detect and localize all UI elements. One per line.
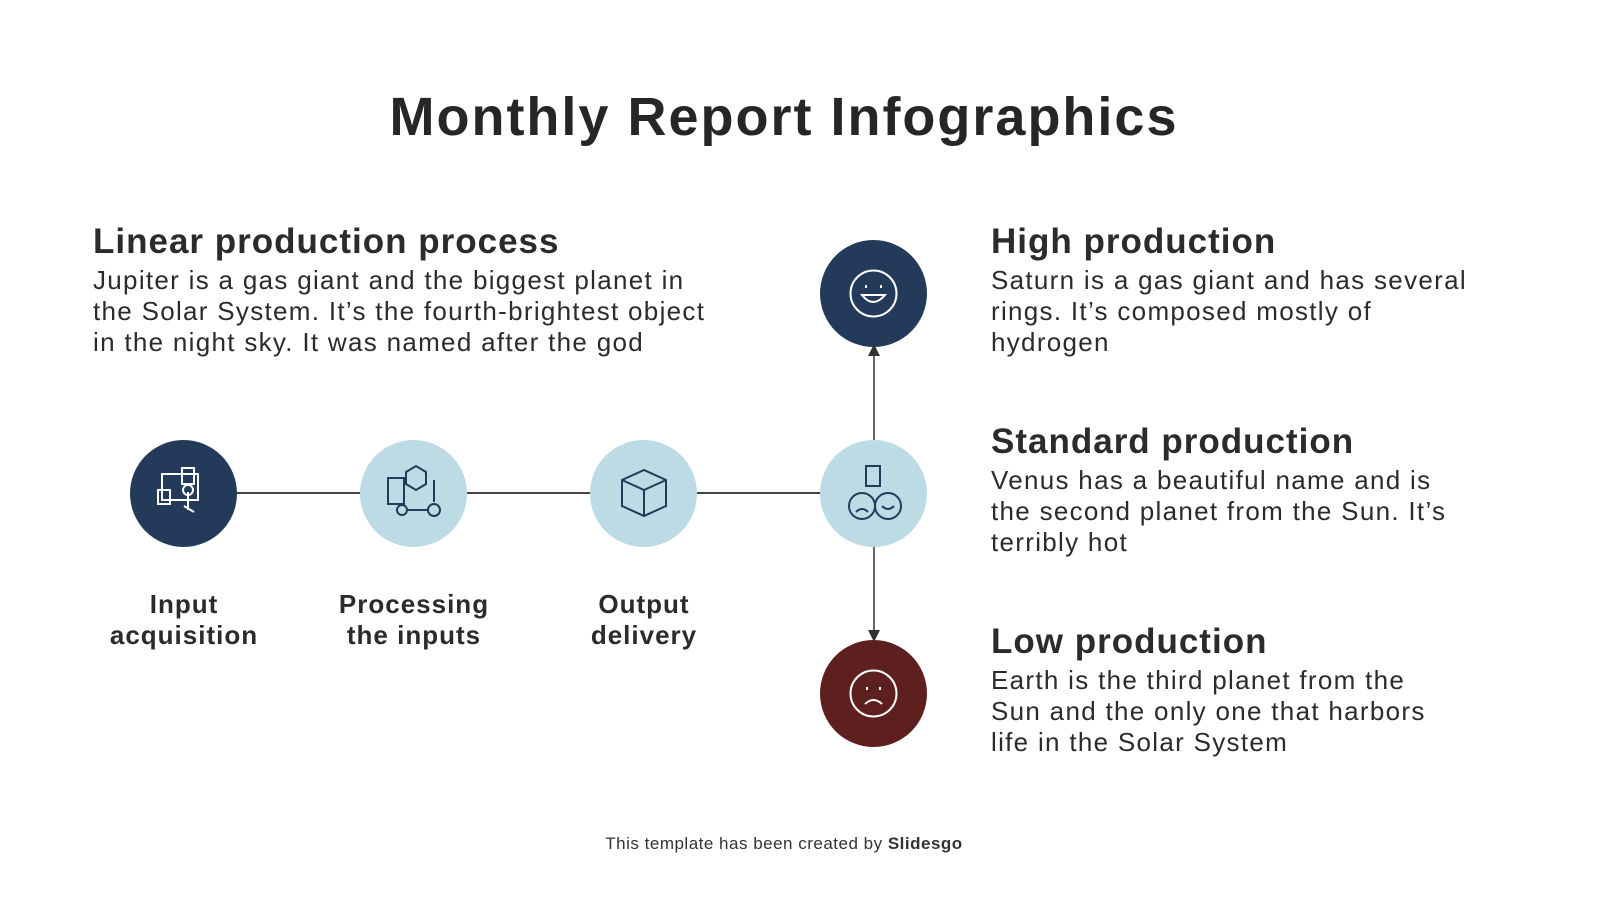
text block: standard (991, 422, 1446, 557)
title: Monthly Report Infographics (390, 87, 1178, 147)
text block: high (991, 222, 1467, 357)
text block: linear production process: Linear production process (93, 222, 559, 261)
label: processing: Processing (339, 589, 489, 619)
text block: linear production process: the Solar System. It’s the fourth-brightest object (93, 296, 705, 326)
label: output: Output (598, 589, 690, 619)
icon: input acquisition (130, 440, 237, 547)
text block: low: life in the Solar System (991, 727, 1288, 757)
text block: low: Earth is the third planet from the (991, 665, 1405, 695)
text block: low: Low production (991, 622, 1267, 661)
label: input (110, 589, 258, 650)
text block: standard: Venus has a beautiful name and is (991, 465, 1431, 495)
text block: standard: Standard production (991, 422, 1354, 461)
text block: low (991, 622, 1426, 757)
label: output: delivery (591, 620, 697, 650)
label: processing (339, 589, 489, 650)
label: output (591, 589, 697, 650)
text block: linear production process: in the night sky. It was named after the god (93, 327, 644, 357)
icon: low (820, 640, 927, 747)
text block: standard: the second planet from the Sun. It’s (991, 496, 1446, 526)
icon: faces (820, 440, 927, 547)
text block: standard: terribly hot (991, 527, 1128, 557)
icon: processing (360, 440, 467, 547)
icon: high (820, 240, 927, 347)
icon: output delivery (590, 440, 697, 547)
text block: linear production process (93, 222, 705, 357)
text block: low: Sun and the only one that harbors (991, 696, 1426, 726)
label: input: Input (150, 589, 218, 619)
text block: high: rings. It’s composed mostly of (991, 296, 1372, 326)
text block: high: High production (991, 222, 1276, 261)
label: input: acquisition (110, 620, 258, 650)
footer: This template has been created by Slidesgo (605, 834, 963, 853)
text block: linear production process: Jupiter is a gas giant and the biggest planet in (93, 265, 684, 295)
label: processing: the inputs (347, 620, 481, 650)
text block: high: hydrogen (991, 327, 1110, 357)
text block: high: Saturn is a gas giant and has several (991, 265, 1467, 295)
